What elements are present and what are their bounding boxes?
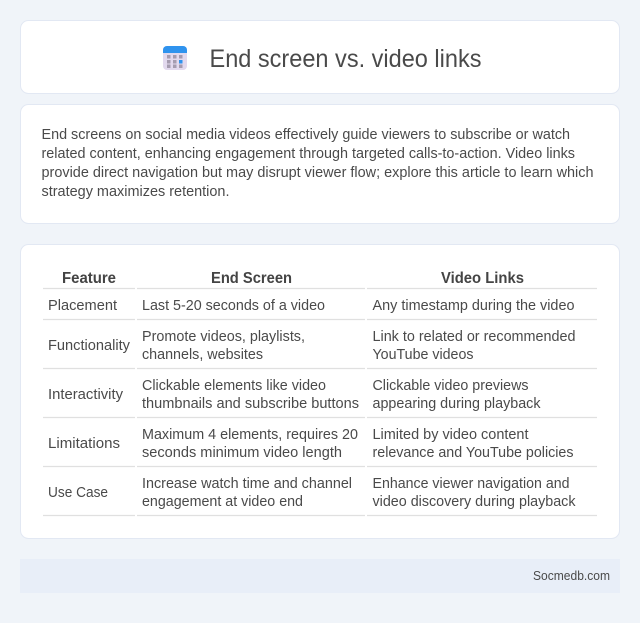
panel: title card <box>20 20 620 94</box>
row: interactivity: thumbnails and subscribe buttons <box>142 396 359 412</box>
row: functionality: channels, websites <box>142 347 263 363</box>
row: limitations: Maximum 4 elements, requires 20 <box>142 427 358 443</box>
row: limitations <box>43 427 597 466</box>
row: interactivity: Interactivity <box>48 387 124 403</box>
row: interactivity: appearing during playback <box>372 396 541 412</box>
row: limitations: Limitations <box>48 436 120 452</box>
panel: comparison table card <box>20 244 620 538</box>
row: limitations: relevance and YouTube policies <box>372 445 574 461</box>
footer source text: Socmedb.com <box>533 569 610 583</box>
row: functionality: Functionality <box>48 338 131 354</box>
title: End screen vs. video links <box>210 45 482 73</box>
row: placement: Placement <box>48 298 117 314</box>
footer bar <box>20 559 620 593</box>
row: use case: Enhance viewer navigation and <box>372 476 570 492</box>
panel: intro text card <box>20 104 620 224</box>
icon: calendar <box>163 46 187 70</box>
row: placement: Last 5-20 seconds of a video <box>142 298 325 314</box>
row: interactivity <box>43 378 597 418</box>
intro paragraph <box>42 127 594 200</box>
row: functionality: YouTube videos <box>372 347 474 363</box>
intro paragraph: strategy maximizes retention. <box>42 184 230 200</box>
row: functionality: Promote videos, playlists, <box>142 329 305 345</box>
intro paragraph: provide direct navigation but may disrupt viewer flow; explore this article to learn which <box>42 165 594 181</box>
row: use case: engagement at video end <box>142 494 303 510</box>
row: interactivity: Clickable elements like video <box>142 378 326 394</box>
row: use case: Use Case <box>48 485 108 501</box>
row: use case <box>43 476 597 516</box>
row: functionality: Link to related or recommended <box>372 329 576 345</box>
intro paragraph: related content, enhancing engagement through targeted calls-to-action. Video links <box>42 146 575 162</box>
table header row: End Screen <box>211 270 292 287</box>
table header row: Video Links <box>441 270 524 287</box>
intro paragraph: End screens on social media videos effectively guide viewers to subscribe or watch <box>42 127 570 143</box>
table header row <box>43 270 597 288</box>
row: use case: video discovery during playback <box>372 494 576 510</box>
row: limitations: Limited by video content <box>372 427 528 443</box>
row: functionality <box>43 329 597 368</box>
row: placement: Any timestamp during the video <box>372 298 574 314</box>
row: placement <box>43 298 597 320</box>
row: use case: Increase watch time and channel <box>142 476 352 492</box>
row: limitations: seconds minimum video length <box>142 445 342 461</box>
row: interactivity: Clickable video previews <box>372 378 528 394</box>
table header row: Feature <box>62 270 116 287</box>
